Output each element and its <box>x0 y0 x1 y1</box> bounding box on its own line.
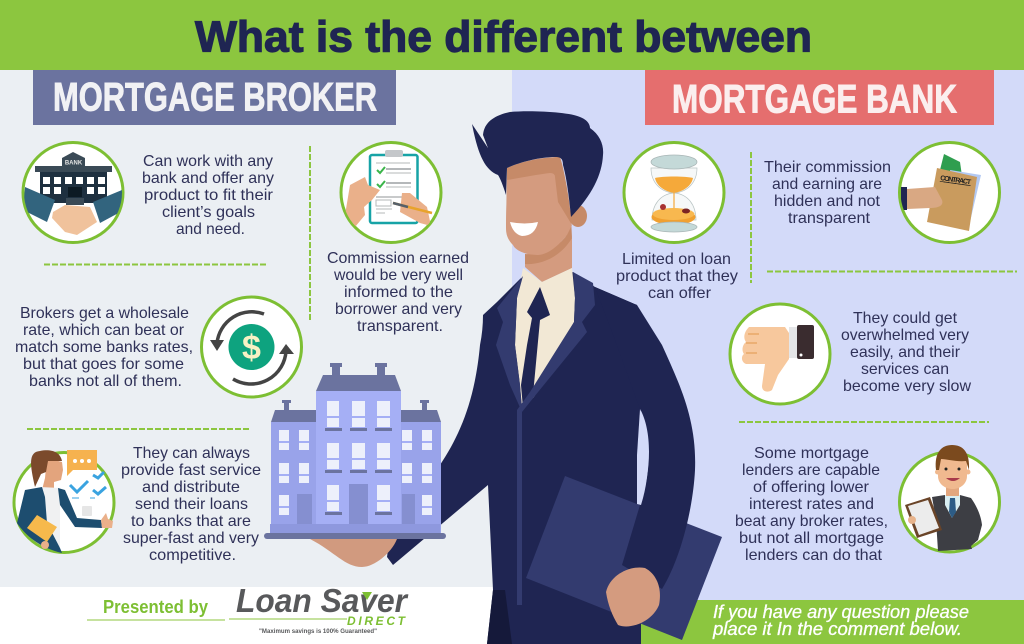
text: fast service: provide fast service <box>121 462 261 479</box>
building on hand <box>264 363 446 567</box>
text: limited on loan <box>616 251 738 302</box>
right arm <box>595 287 695 589</box>
head shading <box>506 157 572 250</box>
shirt <box>515 268 575 408</box>
text: lower interest rates: but not all mortgage <box>739 530 884 547</box>
footer note text: place it In the comment below. <box>712 619 962 639</box>
text: overwhelmed: They could get <box>853 310 958 327</box>
footer note band <box>641 600 1024 644</box>
icon: hourglass <box>624 142 724 242</box>
icon: thumbs down <box>730 304 830 404</box>
text: can work with any bank: Can work with any <box>143 153 273 170</box>
text: overwhelmed <box>841 310 971 395</box>
ear <box>569 205 587 227</box>
presented by label: Presented by <box>103 597 208 617</box>
text: commission earned: informed to the <box>344 284 453 301</box>
text: commission hidden: hidden and not <box>774 193 881 210</box>
hand on folder <box>606 567 660 626</box>
icon: registration form <box>341 142 441 242</box>
text: wholesale rate: match some banks rates, <box>15 339 193 356</box>
businessman illustration <box>387 111 722 644</box>
icon: dollar exchange <box>202 297 302 397</box>
text: commission earned: transparent. <box>357 318 443 335</box>
icon: contract folder: CONTRACT <box>940 175 972 186</box>
text: fast service: competitive. <box>149 547 236 564</box>
heading: mortgage broker: MORTGAGE BROKER <box>53 76 377 120</box>
text: lower interest rates: Some mortgage <box>754 445 869 462</box>
hair <box>472 111 603 217</box>
text: limited on loan: Limited on loan <box>622 251 731 268</box>
text: commission earned: would be very well <box>333 267 463 284</box>
tie <box>521 287 550 408</box>
text: commission earned <box>327 250 469 335</box>
text: can work with any bank: client’s goals <box>162 204 255 221</box>
icon: woman with checklist <box>14 450 114 553</box>
icon: businessman with clipboard <box>900 445 1000 552</box>
lapels <box>517 272 595 605</box>
text: wholesale rate <box>15 305 193 390</box>
logo: loan saver direct: DIRECT <box>347 614 407 628</box>
text: wholesale rate: banks not all of them. <box>29 373 182 390</box>
text: commission earned: borrower and very <box>335 301 462 318</box>
heading: mortgage bank: MORTGAGE BANK <box>672 78 957 122</box>
text: lower interest rates: beat any broker rates, <box>735 513 888 530</box>
footer note text <box>712 602 969 639</box>
logo: loan saver direct: Loan Saver <box>236 582 409 619</box>
text: lower interest rates <box>735 445 888 564</box>
text: fast service: They can always <box>133 445 250 462</box>
text: commission hidden <box>764 159 891 227</box>
text: commission earned: Commission earned <box>327 250 469 267</box>
icon: dollar exchange: $ <box>242 329 261 367</box>
text: overwhelmed: services can <box>861 361 949 378</box>
text: wholesale rate: but that goes for some <box>23 356 184 373</box>
icon: contract folder <box>900 142 1000 242</box>
text: limited on loan: product that they <box>616 268 738 285</box>
text: can work with any bank: product to fit their <box>144 187 274 204</box>
text: lower interest rates: of offering lower <box>753 479 870 496</box>
text: wholesale rate: Brokers get a wholesale <box>20 305 189 322</box>
text: limited on loan: can offer <box>648 285 712 302</box>
smile <box>510 222 538 236</box>
text: overwhelmed: overwhelmed very <box>841 327 969 344</box>
heading: mortgage bank <box>645 70 994 125</box>
logo: loan saver direct <box>229 582 409 635</box>
text: wholesale rate: rate, which can beat or <box>23 322 185 339</box>
title band: What is the different between <box>195 12 812 62</box>
text: can work with any bank: bank and offer any <box>142 170 274 187</box>
icon: bank handshake: BANK <box>65 160 83 166</box>
text: lower interest rates: lenders are capable <box>742 462 880 479</box>
neck <box>525 238 572 282</box>
heading: mortgage broker <box>33 70 396 125</box>
text: fast service <box>121 445 261 564</box>
title band <box>0 0 1024 70</box>
footer note text: If you have any question please <box>713 602 969 622</box>
text: can work with any bank <box>142 153 274 238</box>
text: lower interest rates: lenders can do that <box>745 547 883 564</box>
text: fast service: send their loans <box>135 496 248 513</box>
jacket body <box>387 272 641 644</box>
text: fast service: super-fast and very <box>123 530 259 547</box>
text: fast service: to banks that are <box>131 513 251 530</box>
neck shadow <box>525 235 572 264</box>
text: commission hidden: Their commission <box>764 159 891 176</box>
text: lower interest rates: interest rates and <box>749 496 874 513</box>
logo: loan saver direct: "Maximum savings is 100% Guaranteed" <box>259 629 377 635</box>
text: overwhelmed: become very slow <box>843 378 971 395</box>
face <box>506 173 572 255</box>
text: commission hidden: and earning are <box>772 176 882 193</box>
text: can work with any bank: and need. <box>176 221 245 238</box>
folder <box>526 476 722 640</box>
text: overwhelmed: easily, and their <box>850 344 961 361</box>
icon: bank handshake <box>23 142 124 242</box>
text: fast service: and distribute <box>142 479 240 496</box>
text: commission hidden: transparent <box>788 210 871 227</box>
